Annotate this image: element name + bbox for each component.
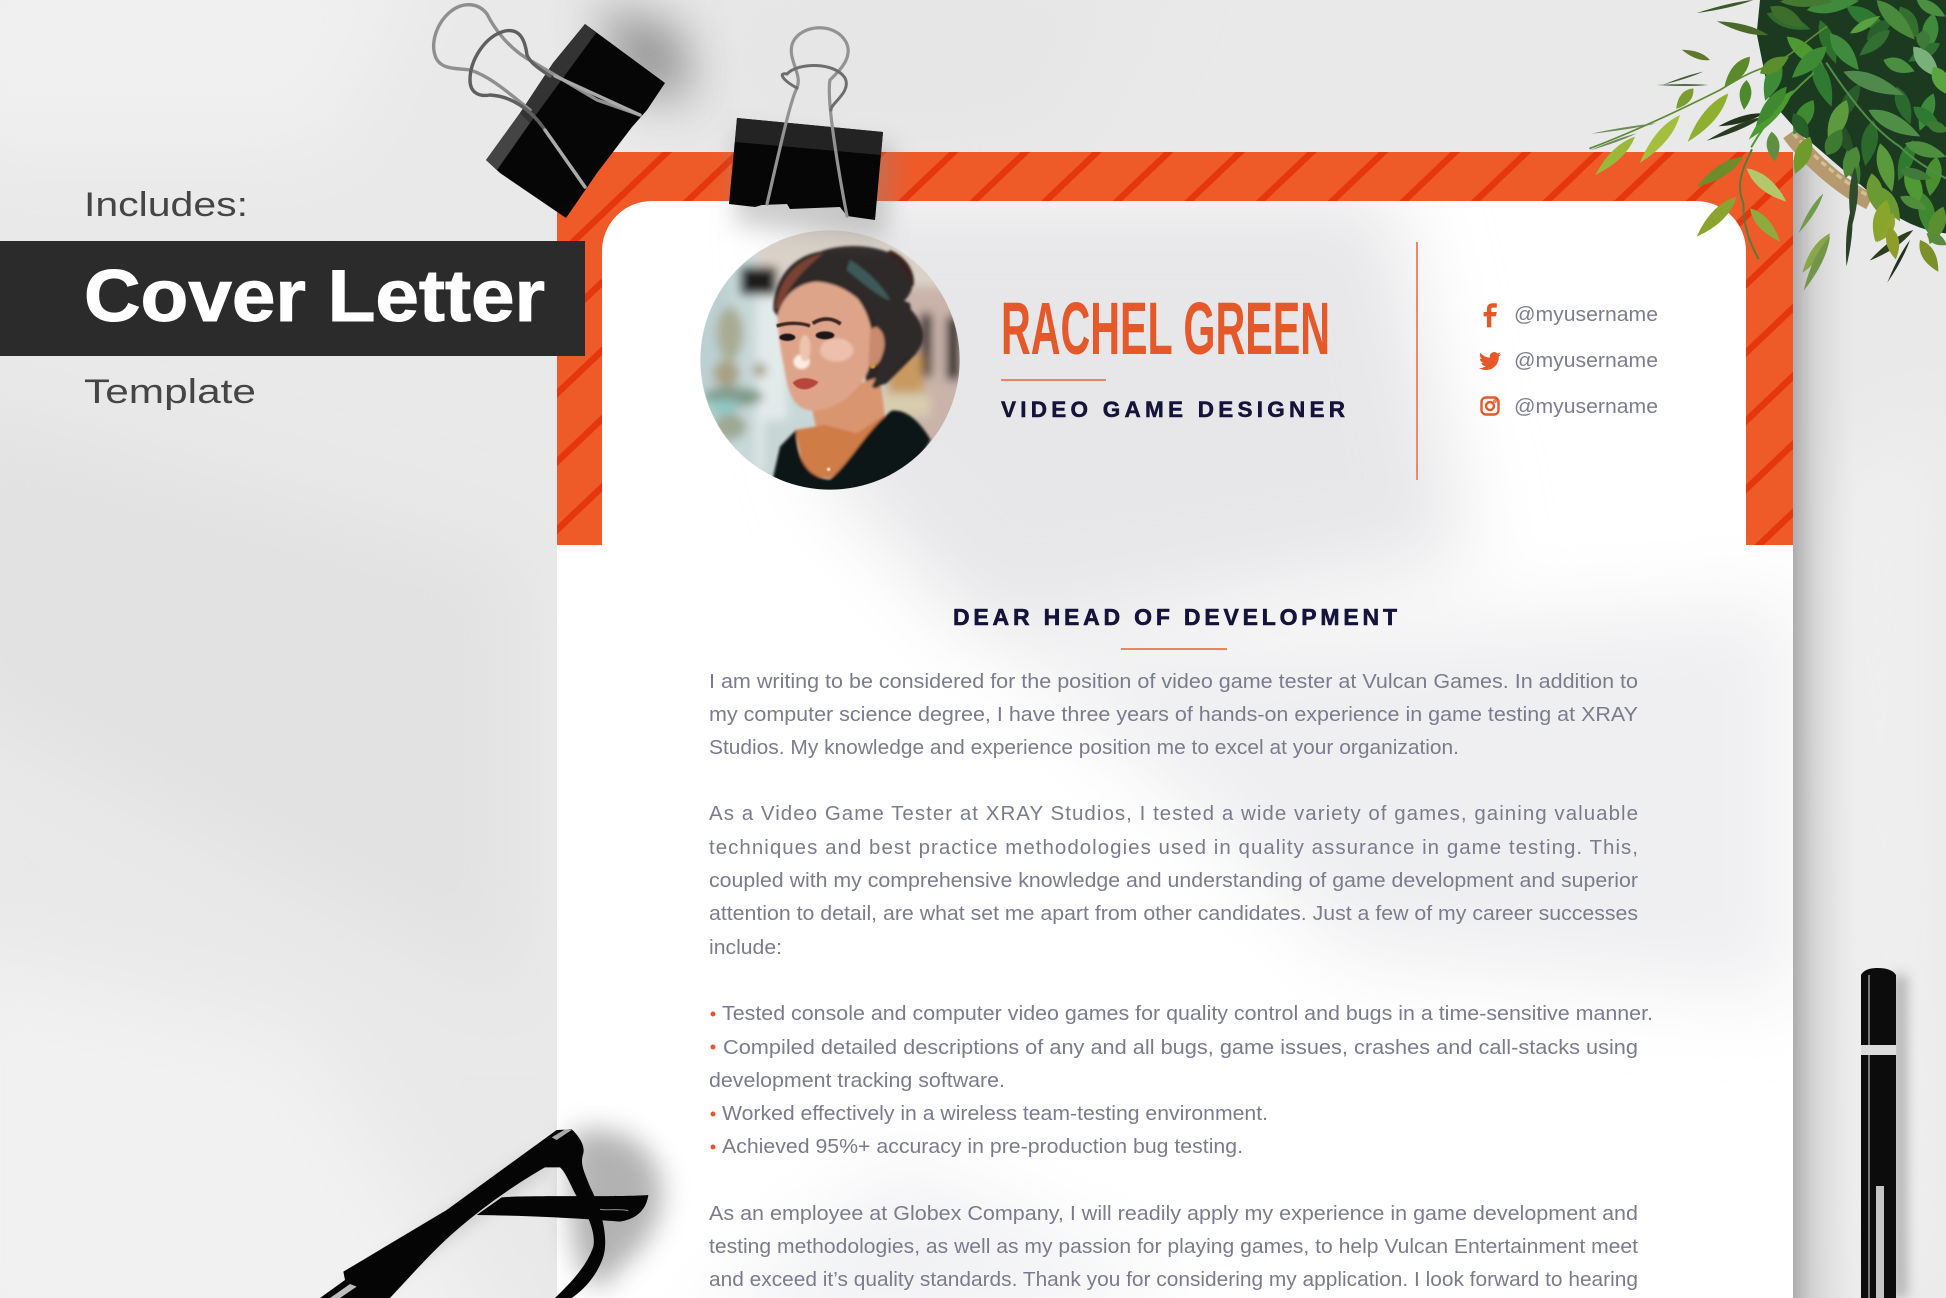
letter body text: and exceed it’s quality standards. Thank you for considering my application. I look forward to hearing (709, 1268, 1638, 1291)
plant leaves (1589, 0, 1946, 292)
handle: twitter: @myusername (1514, 350, 1658, 372)
pen (1861, 968, 1907, 1298)
glasses temple arm (477, 1195, 648, 1222)
name: RACHEL GREEN (1001, 287, 1330, 370)
job title: VIDEO GAME DESIGNER (1001, 397, 1345, 422)
pen shadow (1893, 975, 1907, 1298)
subtitle text: Template (84, 373, 256, 411)
portrait photo (700, 230, 960, 490)
social links (1479, 303, 1658, 418)
clip wire (434, 5, 640, 187)
binder clip centre (729, 28, 895, 240)
paper shadow (1793, 160, 1855, 1298)
plant stems (1590, 27, 1946, 258)
letter body text: development tracking software. (709, 1069, 1005, 1092)
letter body text: Worked effectively in a wireless team-testing environment. (722, 1102, 1268, 1125)
banner background (0, 241, 585, 356)
letter body text (709, 670, 1653, 1291)
eyebrow text: Includes: (84, 186, 248, 224)
letter body text: coupled with my comprehensive knowledge and understanding of game development and superior (709, 869, 1638, 892)
letter body text: Compiled detailed descriptions of any and all bugs, game issues, crashes and call-stacks using (723, 1036, 1638, 1059)
bullet markers (710, 1012, 716, 1150)
letter heading: DEAR HEAD OF DEVELOPMENT (953, 604, 1397, 630)
glasses shadow (350, 1130, 662, 1298)
binder clip left (434, 5, 690, 218)
clip wire (767, 28, 848, 216)
clip shadow (735, 130, 895, 240)
banner title: Cover Letter (84, 256, 545, 337)
header divider (1416, 242, 1418, 480)
glasses frame (320, 1129, 605, 1298)
heading underline (1121, 648, 1227, 650)
letter body text: As an employee at Globex Company, I will readily apply my experience in game development and (709, 1202, 1638, 1225)
plant mass and basket (1757, 0, 1946, 233)
name underline (1001, 379, 1106, 381)
icon: instagram (1482, 398, 1498, 414)
icon: facebook (1484, 303, 1497, 327)
letter body text: Studios. My knowledge and experience position me to excel at your organization. (709, 736, 1459, 759)
orange header band with stripes (557, 152, 1793, 545)
handle: instagram: @myusername (1514, 396, 1658, 418)
letter body text: I am writing to be considered for the position of video game tester at Vulcan Games. In addition to (709, 670, 1638, 693)
plant (1589, 0, 1946, 292)
letter body text: Achieved 95%+ accuracy in pre-production bug testing. (722, 1135, 1243, 1158)
clip body (486, 24, 665, 218)
clip body (729, 118, 883, 220)
glasses highlights (330, 1129, 628, 1298)
clip shadow (595, 5, 690, 100)
letter body text: As a Video Game Tester at XRAY Studios, I tested a wide variety of games, gaining valuable (709, 802, 1638, 825)
title banner (0, 186, 585, 411)
glasses (320, 1129, 662, 1298)
letter body text: testing methodologies, as well as my passion for playing games, to help Vulcan Entertainment meet (709, 1235, 1638, 1258)
letter body text: include: (709, 936, 782, 959)
paper sheet (557, 152, 1793, 1298)
letter body text: techniques and best practice methodologies used in quality assurance in game testing. This, (709, 836, 1638, 859)
letter body text: my computer science degree, I have three years of hands-on experience in game testing at XRAY (709, 703, 1638, 726)
letter body text: Tested console and computer video games for quality control and bugs in a time-sensitive manner. (722, 1002, 1653, 1025)
icon: twitter (1479, 352, 1501, 370)
pen body (1861, 968, 1896, 1298)
handle: facebook: @myusername (1514, 304, 1658, 326)
letter body text: attention to detail, are what set me apart from other candidates. Just a few of my career successes (709, 902, 1638, 925)
